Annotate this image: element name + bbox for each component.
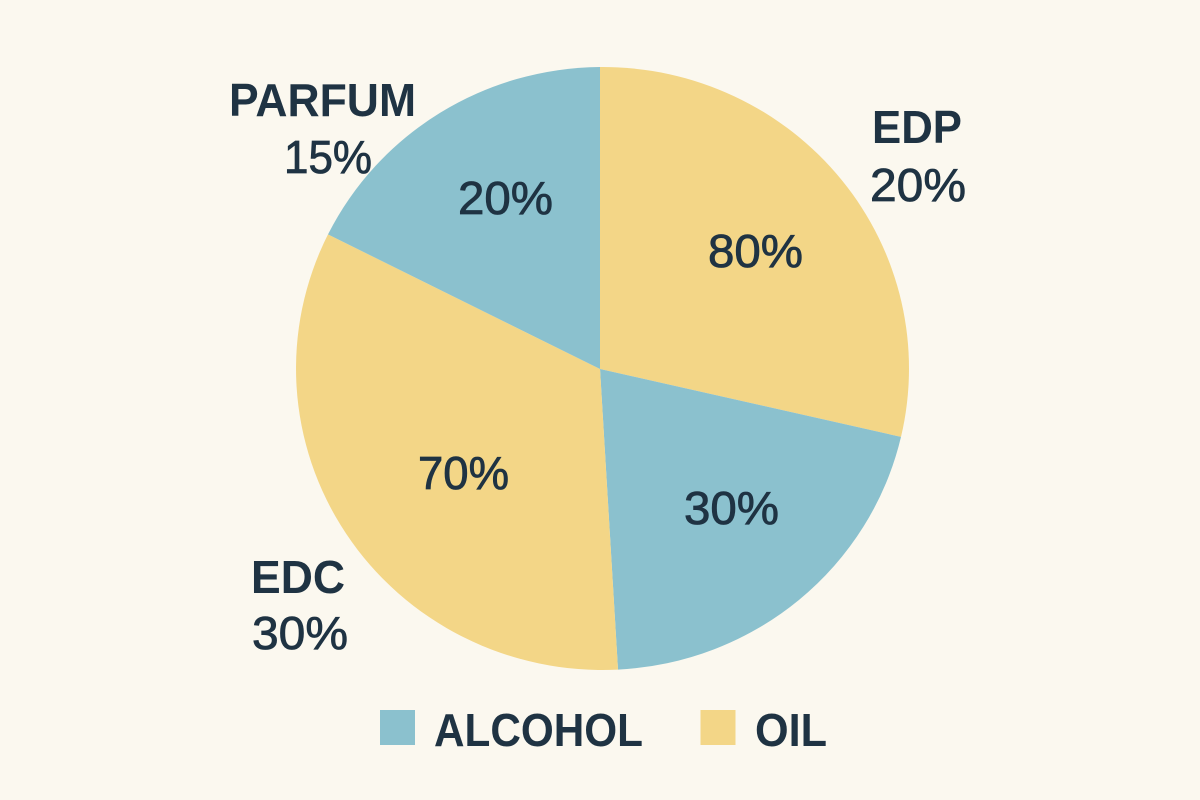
label: EDP 20% <box>870 101 966 211</box>
slice: EDP oil <box>600 67 909 437</box>
slice label: 80%: 80% <box>708 225 803 277</box>
slice: parfum alcohol <box>328 67 600 369</box>
slice label: 30%: 30% <box>684 482 779 534</box>
label: EDP 20%: 20% <box>870 159 966 211</box>
legend <box>380 704 827 756</box>
label: EDC 30% <box>251 551 348 659</box>
slice label: 20%: 20% <box>458 172 553 224</box>
slice: EDC oil <box>296 234 618 670</box>
legend swatch: oil <box>700 710 736 745</box>
slice label: 70%: 70% <box>418 447 509 499</box>
legend label: alcohol: ALCOHOL <box>434 704 643 756</box>
pie chart <box>296 67 909 670</box>
label: EDC 30%: EDC <box>251 551 345 603</box>
label: PARFUM 15%: PARFUM <box>229 74 416 126</box>
legend label: oil: OIL <box>755 704 827 756</box>
label: PARFUM 15%: 15% <box>284 131 372 183</box>
legend swatch: alcohol <box>380 710 415 745</box>
label: PARFUM 15% <box>229 74 416 183</box>
label: EDC 30%: 30% <box>252 607 348 659</box>
label: EDP 20%: EDP <box>872 101 962 153</box>
slice: alcohol 30% <box>600 369 901 670</box>
